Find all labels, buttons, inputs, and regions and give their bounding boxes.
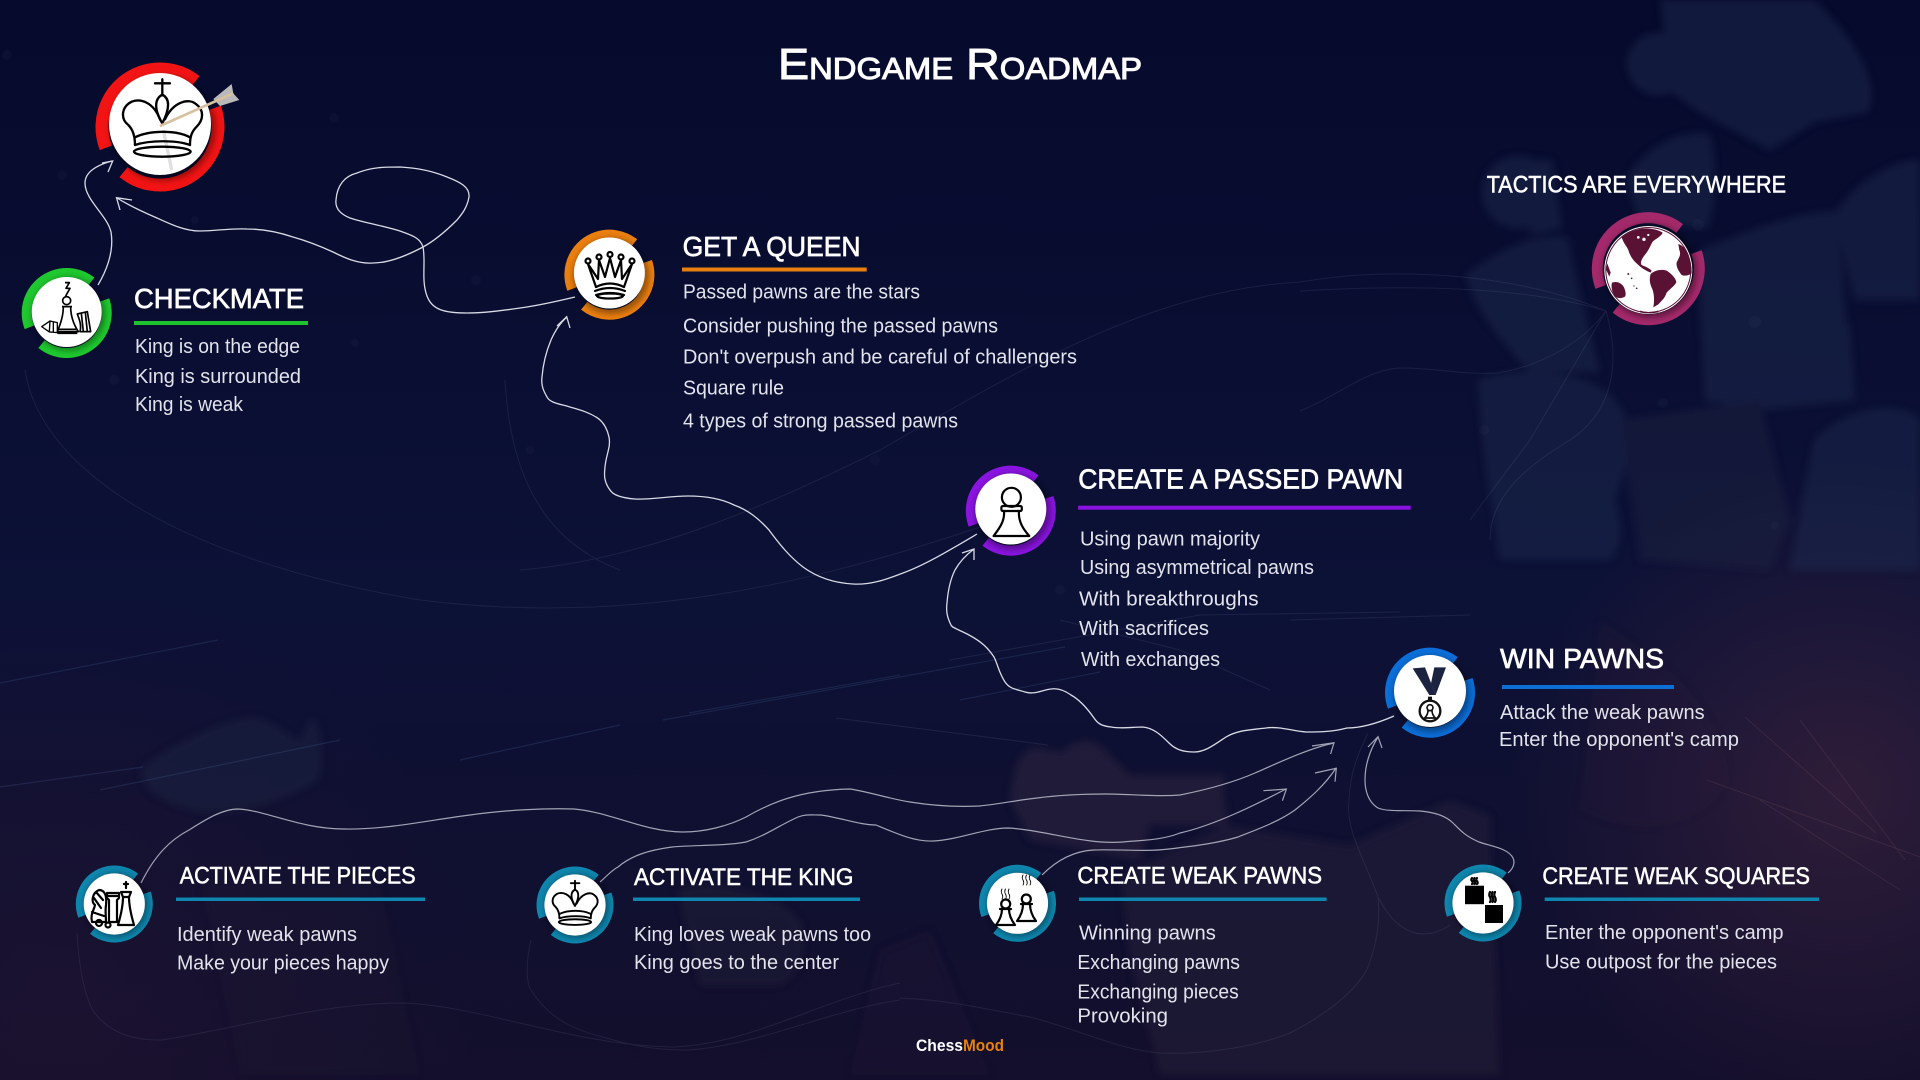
icon: group of pieces: [70, 860, 158, 948]
text block: King loves weak pawns too: [634, 923, 871, 946]
logo: ChessMood: Mood: [963, 1036, 1004, 1055]
icon: toppled king: [16, 262, 118, 364]
panel: checkmate: [16, 262, 308, 416]
panel: activate the king: [531, 861, 871, 974]
text block: [1499, 701, 1739, 751]
heading: CREATE WEAK PAWNS: [1077, 862, 1322, 889]
icon: weak pawns: [974, 859, 1061, 947]
panel: create weak pawns: [974, 859, 1327, 1027]
icon: globe: [1583, 204, 1713, 334]
text block: [1545, 921, 1784, 974]
icon: king crown: [531, 861, 619, 949]
text block: [135, 335, 301, 416]
text block: Use outpost for the pieces: [1545, 951, 1777, 974]
text block: Using pawn majority: [1080, 528, 1261, 551]
arrow: checkmate to king: [85, 161, 113, 285]
icon: medal with pawn: [1379, 642, 1481, 744]
text block: Winning pawns: [1079, 921, 1216, 944]
arrow: win pawns to passed pawn: [947, 549, 1394, 752]
text block: Using asymmetrical pawns: [1080, 556, 1314, 579]
heading: CREATE WEAK SQUARES: [1542, 863, 1810, 890]
arrow: activate the pieces to win pawns: [141, 743, 1334, 883]
arrow: activate the king to win pawns: [600, 789, 1286, 882]
text block: With exchanges: [1081, 648, 1220, 671]
text block: Identify weak pawns: [177, 923, 357, 946]
logo: ChessMood: Chess: [916, 1036, 963, 1055]
heading: WIN PAWNS: [1500, 643, 1664, 674]
icon: queen crown: [559, 224, 660, 326]
text block: Make your pieces happy: [177, 951, 390, 974]
panel: create weak squares: [1439, 859, 1819, 974]
text block: Enter the opponent's camp: [1545, 921, 1784, 944]
text block: With sacrifices: [1079, 617, 1209, 640]
text block: King is on the edge: [135, 335, 300, 358]
panel: get a queen: [559, 224, 1077, 432]
icon: pawn: [960, 460, 1062, 562]
text block: Square rule: [683, 376, 784, 399]
icon: weak squares: [1439, 859, 1527, 947]
logo: ChessMood: [916, 1036, 1004, 1055]
heading: ACTIVATE THE KING: [634, 864, 854, 891]
heading: GET A QUEEN: [683, 231, 861, 262]
arrow: create weak squares to win pawns: [1365, 737, 1514, 873]
panel: win pawns: [1379, 642, 1739, 751]
text block: [1077, 921, 1240, 1027]
text block: Passed pawns are the stars: [683, 280, 920, 303]
arrow: passed pawn to queen: [542, 317, 977, 584]
heading: ACTIVATE THE PIECES: [180, 862, 416, 889]
text block: [177, 923, 390, 974]
text block: [1079, 528, 1314, 671]
panel: create a passed pawn: [960, 460, 1411, 671]
arrow: queen to king: [116, 167, 575, 313]
text block: King is weak: [135, 393, 244, 416]
text block: Attack the weak pawns: [1500, 701, 1705, 724]
text block: Provoking: [1077, 1004, 1168, 1027]
text block: Exchanging pieces: [1077, 981, 1239, 1004]
text block: King goes to the center: [634, 951, 839, 974]
panel: activate the pieces: [70, 860, 425, 974]
heading: TACTICS ARE EVERYWHERE: [1487, 172, 1786, 199]
icon: king with arrow target: [86, 53, 239, 201]
text block: Enter the opponent's camp: [1499, 728, 1739, 751]
text block: 4 types of strong passed pawns: [683, 409, 958, 432]
heading: CREATE A PASSED PAWN: [1078, 463, 1403, 494]
text block: Consider pushing the passed pawns: [683, 314, 998, 337]
arrow: create weak pawns to win pawns: [1042, 768, 1336, 875]
text block: King is surrounded: [135, 365, 301, 388]
text block: Exchanging pawns: [1077, 951, 1240, 974]
text block: With breakthroughs: [1079, 588, 1259, 611]
title: Endgame Roadmap: [778, 40, 1142, 89]
text block: [634, 923, 871, 974]
text block: Don't overpush and be careful of challengers: [683, 345, 1077, 368]
text block: [683, 280, 1077, 432]
heading: CHECKMATE: [134, 283, 304, 314]
panel: tactics are everywhere: [1487, 172, 1786, 334]
